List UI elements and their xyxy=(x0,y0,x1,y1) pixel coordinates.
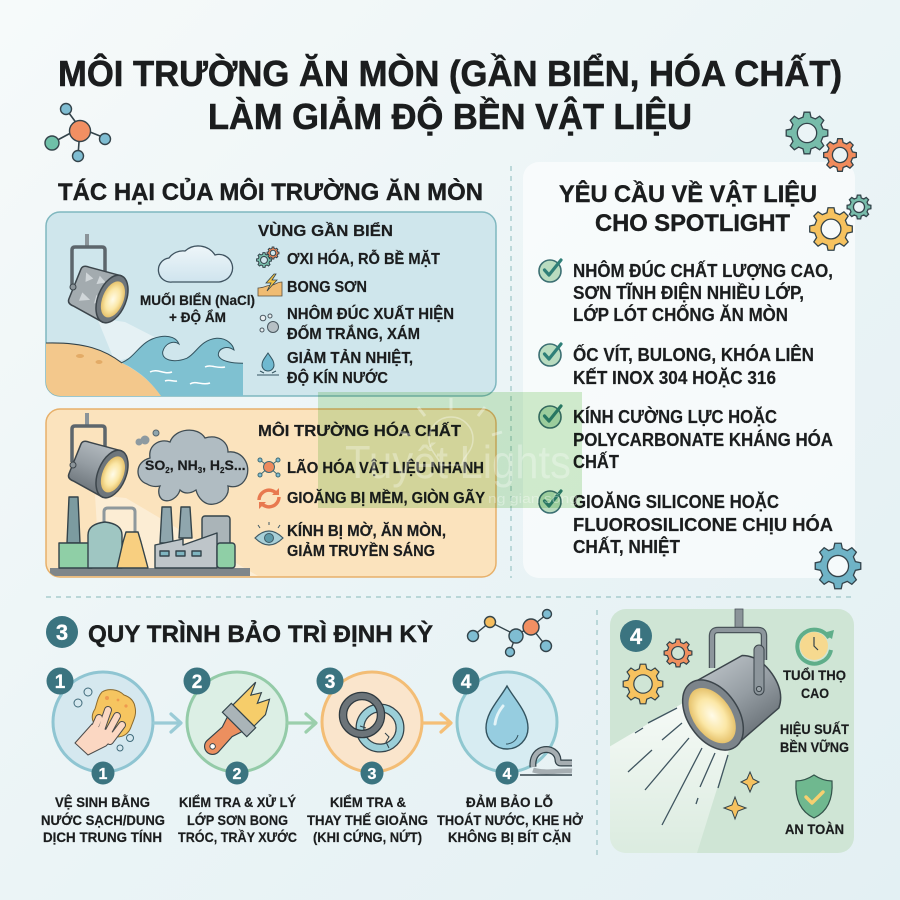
caption: step 2: TRÓC, TRẦY XƯỚC xyxy=(178,828,297,845)
caption: step 3: (KHI CỨNG, NỨT) xyxy=(313,828,422,845)
item: stainless fasteners: ỐC VÍT, BULONG, KHÓA LIÊN xyxy=(573,344,814,365)
watermark xyxy=(318,392,582,508)
item: reduced cooling and sealing: ĐỘ KÍN NƯỚC xyxy=(287,368,388,387)
icon: cloud xyxy=(158,246,233,282)
caption: step 2: LỚP SƠN BONG xyxy=(187,811,288,828)
label: sustained performance xyxy=(780,720,849,755)
step 4: drain holes xyxy=(437,668,583,845)
label: long life: TUỔI THỌ xyxy=(783,666,846,683)
icon: sponge and hand xyxy=(74,688,136,755)
caption: step 2 xyxy=(178,793,297,845)
item: white spots: NHÔM ĐÚC XUẤT HIỆN xyxy=(287,304,454,323)
heading: material requirements xyxy=(559,180,817,237)
icon: drain pipe xyxy=(520,750,572,775)
item: silicone gasket: FLUOROSILICONE CHỊU HÓA xyxy=(573,514,833,535)
badge: top 3 xyxy=(316,668,344,694)
caption: step 1: NƯỚC SẠCH/DUNG xyxy=(41,811,165,828)
icon: safety shield xyxy=(796,775,832,818)
caption: step 3: KIỂM TRA & xyxy=(330,793,406,810)
icon: gears xyxy=(623,639,692,704)
badge: top 2: 2 xyxy=(192,672,202,693)
caption: step 3: THAY THẾ GIOĂNG xyxy=(307,812,428,828)
caption: step 4 xyxy=(437,793,583,845)
icon: smoke cloud with gases: 3 xyxy=(198,466,203,475)
badge: bottom 3 xyxy=(360,762,384,784)
heading: chemical environment: MÔI TRƯỜNG HÓA CHẤT xyxy=(258,421,461,440)
item: brittle gasket xyxy=(259,487,485,509)
badge: bottom 2: 2 xyxy=(233,766,242,783)
badge: top 4: 4 xyxy=(461,672,472,693)
heading: maintenance procedure: 3 xyxy=(56,620,68,645)
badge: 4 xyxy=(620,620,652,652)
badge: top 1: 1 xyxy=(55,672,66,693)
text: watermark name: Tuyết Lights xyxy=(345,436,571,488)
heading: coastal zone: VÙNG GẦN BIỂN xyxy=(258,221,393,240)
badge: bottom 3: 3 xyxy=(368,766,377,783)
icon: molecule maintenance xyxy=(468,610,552,656)
label: safe: AN TOÀN xyxy=(785,821,844,837)
item: tempered glass: CHẤT xyxy=(573,451,619,472)
icon: smoke cloud with gases: , NH xyxy=(170,457,198,473)
icon: sparkles xyxy=(724,772,759,819)
arrow: step 1 to 2 xyxy=(154,714,181,732)
label: sea salt and humidity: + ĐỘ ẨM xyxy=(169,310,226,325)
badge: bottom 4 xyxy=(496,762,518,784)
panel: chemical environment xyxy=(46,409,496,577)
title: LÀM GIẢM ĐỘ BỀN VẬT LIỆU xyxy=(208,95,692,137)
item: tempered glass xyxy=(539,406,833,472)
step 2: paint inspection xyxy=(178,668,297,845)
illustration: factories xyxy=(50,495,258,576)
icon: smoke cloud with gases: S... xyxy=(224,457,246,473)
arrow: step 2 to 3 xyxy=(288,714,316,732)
item: oxidation: ƠXI HÓA, RỖ BỀ MẶT xyxy=(287,249,440,268)
item: reduced cooling and sealing: GIẢM TẢN NHIỆT, xyxy=(287,348,413,367)
caption: step 1: VỆ SINH BẰNG xyxy=(55,793,150,810)
item: stainless fasteners xyxy=(539,344,814,388)
heading: material requirements: YÊU CẦU VỀ VẬT LIỆU xyxy=(559,180,817,208)
label: sustained performance: BỀN VỮNG xyxy=(780,738,849,755)
item: tempered glass: POLYCARBONATE KHÁNG HÓA xyxy=(573,429,833,450)
item: blurred glass xyxy=(255,521,446,560)
badge: top 1 xyxy=(46,668,74,694)
item: stainless fasteners: KẾT INOX 304 HOẶC 316 xyxy=(573,367,776,388)
badge: bottom 1: 1 xyxy=(99,766,108,783)
item: die-cast aluminum: LỚP LÓT CHỐNG ĂN MÒN xyxy=(573,304,788,325)
badge: bottom 4: 4 xyxy=(503,766,512,783)
item: peeling paint: BONG SƠN xyxy=(287,279,367,296)
item: die-cast aluminum: SƠN TĨNH ĐIỆN NHIỀU LỚP, xyxy=(573,282,804,303)
heading: material requirements: CHO SPOTLIGHT xyxy=(595,210,790,237)
illustration: sea and sand xyxy=(46,318,243,397)
heading: corrosion damage: TÁC HẠI CỦA MÔI TRƯỜNG ĂN MÒN xyxy=(58,177,483,206)
panel: coastal zone xyxy=(46,212,496,397)
title: MÔI TRƯỜNG ĂN MÒN (GẦN BIỂN, HÓA CHẤT) xyxy=(58,52,842,94)
caption: step 4: ĐẢM BẢO LỖ xyxy=(466,793,553,810)
item: blurred glass: GIẢM TRUYỀN SÁNG xyxy=(287,541,435,560)
item: silicone gasket xyxy=(539,491,833,557)
icon: smoke cloud with gases: SO xyxy=(145,457,165,473)
item: silicone gasket: GIOĂNG SILICONE HOẶC xyxy=(573,491,779,512)
caption: step 3 xyxy=(307,793,428,845)
icon: watermark bulb xyxy=(400,398,502,465)
item: die-cast aluminum: NHÔM ĐÚC CHẤT LƯỢNG CAO, xyxy=(573,260,833,281)
panel: benefits xyxy=(609,609,854,853)
item: tempered glass: KÍNH CƯỜNG LỰC HOẶC xyxy=(573,406,777,427)
icon: smoke cloud with gases xyxy=(136,430,248,504)
icon: water drop xyxy=(486,686,528,749)
icon: gasket rings xyxy=(343,696,400,748)
caption: step 4: THOÁT NƯỚC, KHE HỞ xyxy=(437,811,583,828)
title xyxy=(58,52,842,137)
icon: clock lifetime xyxy=(797,630,834,664)
item: silicone gasket: CHẤT, NHIỆT xyxy=(573,536,680,557)
item: brittle gasket: GIOĂNG BỊ MỀM, GIÒN GÃY xyxy=(287,487,485,507)
label: sea salt and humidity: MUỐI BIỂN (NaCl) xyxy=(140,293,255,308)
illustration: light beam xyxy=(609,703,730,853)
icon: molecule top left xyxy=(45,104,110,162)
step 3: gasket check xyxy=(307,668,428,845)
badge: bottom 1 xyxy=(92,762,114,784)
caption: step 2: KIỂM TRA & XỬ LÝ xyxy=(179,793,297,810)
item: reduced cooling and sealing xyxy=(257,348,413,387)
item: fast aging xyxy=(258,457,484,477)
step 1: cleaning xyxy=(41,668,165,845)
icon: gears top right xyxy=(786,112,871,250)
icon: smoke cloud with gases: 2 xyxy=(220,466,225,475)
label: sustained performance: HIỆU SUẤT xyxy=(780,720,849,737)
label: long life: CAO xyxy=(801,685,829,701)
panel: material requirements xyxy=(523,162,855,578)
icon: gear bottom right xyxy=(815,543,861,589)
badge: top 4 xyxy=(452,668,480,694)
text: watermark tagline: ng gian sống xyxy=(488,491,578,506)
icon: corroded spotlight xyxy=(66,234,134,327)
label: sea salt and humidity xyxy=(140,293,255,325)
caption: step 1 xyxy=(41,793,165,845)
heading: maintenance procedure: QUY TRÌNH BẢO TRÌ ĐỊNH KỲ xyxy=(88,619,433,648)
item: white spots xyxy=(260,304,454,343)
badge: top 3: 3 xyxy=(325,672,335,693)
badge: top 2 xyxy=(184,668,210,694)
icon: smoke cloud with gases: 2 xyxy=(165,466,170,475)
item: die-cast aluminum xyxy=(539,260,833,325)
icon: spotlight xyxy=(66,413,134,502)
item: white spots: ĐỐM TRẮNG, XÁM xyxy=(287,323,420,343)
item: blurred glass: KÍNH BỊ MỜ, ĂN MÒN, xyxy=(287,521,446,540)
icon: brush xyxy=(195,681,278,764)
arrow: step 3 to 4 xyxy=(423,714,451,732)
icon: large spotlight xyxy=(670,609,794,761)
label: long life xyxy=(783,666,846,701)
badge: 4: 4 xyxy=(630,624,643,649)
item: oxidation xyxy=(257,247,440,268)
badge: bottom 2 xyxy=(226,762,248,784)
caption: step 4: KHÔNG BỊ BÍT CẶN xyxy=(448,828,571,845)
icon: smoke cloud with gases: , H xyxy=(202,457,220,473)
item: fast aging: LÃO HÓA VẬT LIỆU NHANH xyxy=(287,457,484,477)
caption: step 1: DỊCH TRUNG TÍNH xyxy=(43,829,162,845)
item: peeling paint xyxy=(258,274,367,296)
